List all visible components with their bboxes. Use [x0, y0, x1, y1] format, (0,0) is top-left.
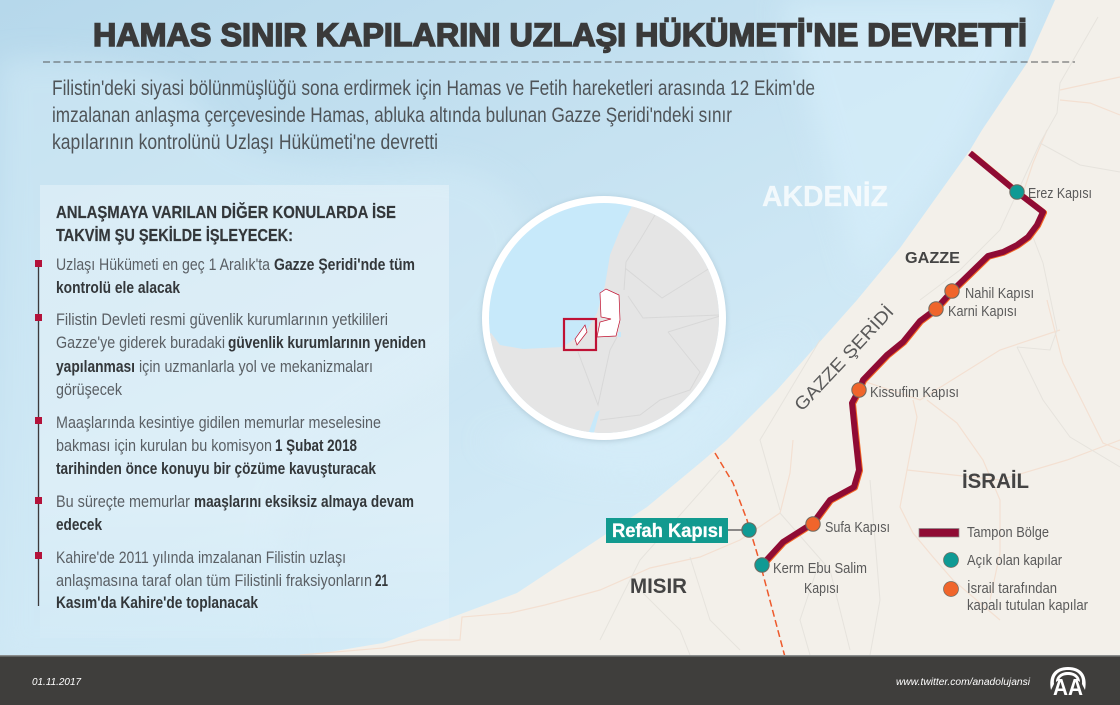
date: 01.11.2017	[32, 677, 81, 688]
footer bar	[0, 655, 1120, 705]
item 4: edecek	[56, 516, 103, 534]
border gates	[742, 185, 1024, 572]
gate labels: Sufa Kapısı	[825, 519, 890, 536]
intro text: kapılarının kontrolünü Uzlaşı Hükümeti'ne devretti	[52, 131, 438, 154]
gate: Nahil	[945, 284, 959, 298]
timeline markers	[35, 260, 42, 559]
icon: Anadolu Agency logo: AA	[1053, 674, 1083, 700]
item 3: bakması için kurulan bu komisyon	[56, 437, 272, 455]
item 4	[56, 493, 414, 534]
west bank	[597, 289, 620, 337]
label: Gazze Şeridi: GAZZE ŞERİDİ	[790, 302, 898, 415]
land map	[300, 0, 1120, 657]
item 4: maaşlarını eksiksiz almaya devam	[194, 493, 414, 511]
item 2: Filistin Devleti resmi güvenlik kurumlarının yetkilileri	[56, 311, 388, 329]
gaza strip	[575, 325, 587, 345]
gate labels: Erez Kapısı	[1028, 185, 1092, 202]
gate labels: Nahil Kapısı	[965, 285, 1034, 302]
gate: Karni	[929, 302, 943, 316]
label: Gazze: GAZZE	[905, 250, 960, 267]
item 2: görüşecek	[56, 381, 123, 399]
legend	[919, 524, 1088, 614]
locator map circle	[480, 196, 728, 443]
panel heading	[56, 201, 396, 245]
item 5: Kasım'da Kahire'de toplanacak	[56, 594, 259, 612]
gate: Sufa	[806, 517, 820, 531]
Refah callout: Refah Kapısı	[612, 521, 723, 542]
buffer zone line	[762, 153, 1044, 566]
item 2: güvenlik kurumlarının yeniden	[228, 334, 426, 352]
item 3: tarihinden önce konuyu bir çözüme kavuşturacak	[56, 460, 377, 478]
timeline line	[38, 263, 40, 606]
item 5	[56, 549, 388, 612]
item 2: yapılanması	[56, 358, 135, 376]
red locator box	[564, 319, 596, 350]
title: HAMAS SINIR KAPILARINI UZLAŞI HÜKÜMETİ'NE DEVRETTİ	[93, 17, 1027, 53]
item 1: Gazze Şeridi'nde tüm	[274, 256, 415, 274]
gate labels: Kapısı	[804, 580, 839, 597]
roads	[300, 17, 1120, 655]
gate labels: Karni Kapısı	[948, 303, 1017, 320]
intro text	[52, 77, 815, 154]
gate: Kerm Ebu Salim	[755, 558, 769, 572]
gate labels: Kerm Ebu Salim	[773, 560, 867, 577]
legend: kapalı tutulan kapılar	[967, 597, 1088, 614]
item 1: kontrolü ele alacak	[56, 279, 181, 297]
label: Mısır: MISIR	[630, 575, 687, 598]
item 3: Maaşlarında kesintiye gidilen memurlar meselesine	[56, 414, 381, 432]
panel heading: TAKVİM ŞU ŞEKİLDE İŞLEYECEK:	[56, 225, 293, 245]
gate labels: Kissufim Kapısı	[870, 384, 959, 401]
item 5: Kahire'de 2011 yılında imzalanan Filistin uzlaşı	[56, 549, 346, 567]
gate: Refah	[742, 523, 756, 537]
intro text: imzalanan anlaşma çerçevesinde Hamas, abluka altında bulunan Gazze Şeridi'ndeki sınır	[52, 104, 732, 127]
intro text: Filistin'deki siyasi bölünmüşlüğü sona erdirmek için Hamas ve Fetih hareketleri arasında 12 Ekim'de	[52, 77, 815, 100]
panel: agreement timetable	[35, 185, 449, 638]
legend: Açık olan kapılar	[967, 552, 1062, 569]
item 3	[56, 414, 381, 478]
twitter url: www.twitter.com/anadolujansi	[896, 677, 1031, 688]
item 2	[56, 311, 426, 399]
item 1	[56, 256, 415, 297]
legend: İsrail tarafından	[967, 579, 1057, 597]
title divider	[43, 61, 1075, 63]
gate: Kissufim	[852, 383, 866, 397]
item 5: 21	[375, 572, 388, 590]
item 2: Gazze'ye giderek buradaki	[56, 334, 225, 352]
label: Akdeniz: AKDENİZ	[762, 181, 888, 213]
panel heading: ANLAŞMAYA VARILAN DİĞER KONULARDA İSE	[56, 201, 396, 222]
item 2: için uzmanlarla yol ve mekanizmaları	[139, 358, 373, 376]
gate labels	[773, 185, 1092, 597]
legend: Tampon Bölge	[967, 524, 1049, 541]
item 1: Uzlaşı Hükümeti en geç 1 Aralık'ta	[56, 256, 271, 274]
gate: Erez	[1010, 185, 1024, 199]
item 5: anlaşmasına taraf olan tüm Filistinli fraksiyonların	[56, 572, 372, 590]
border dashed line	[715, 453, 785, 657]
item 3: 1 Şubat 2018	[275, 437, 357, 455]
item 4: Bu süreçte memurlar	[56, 493, 190, 511]
label: İsrail: İSRAİL	[962, 470, 1029, 493]
